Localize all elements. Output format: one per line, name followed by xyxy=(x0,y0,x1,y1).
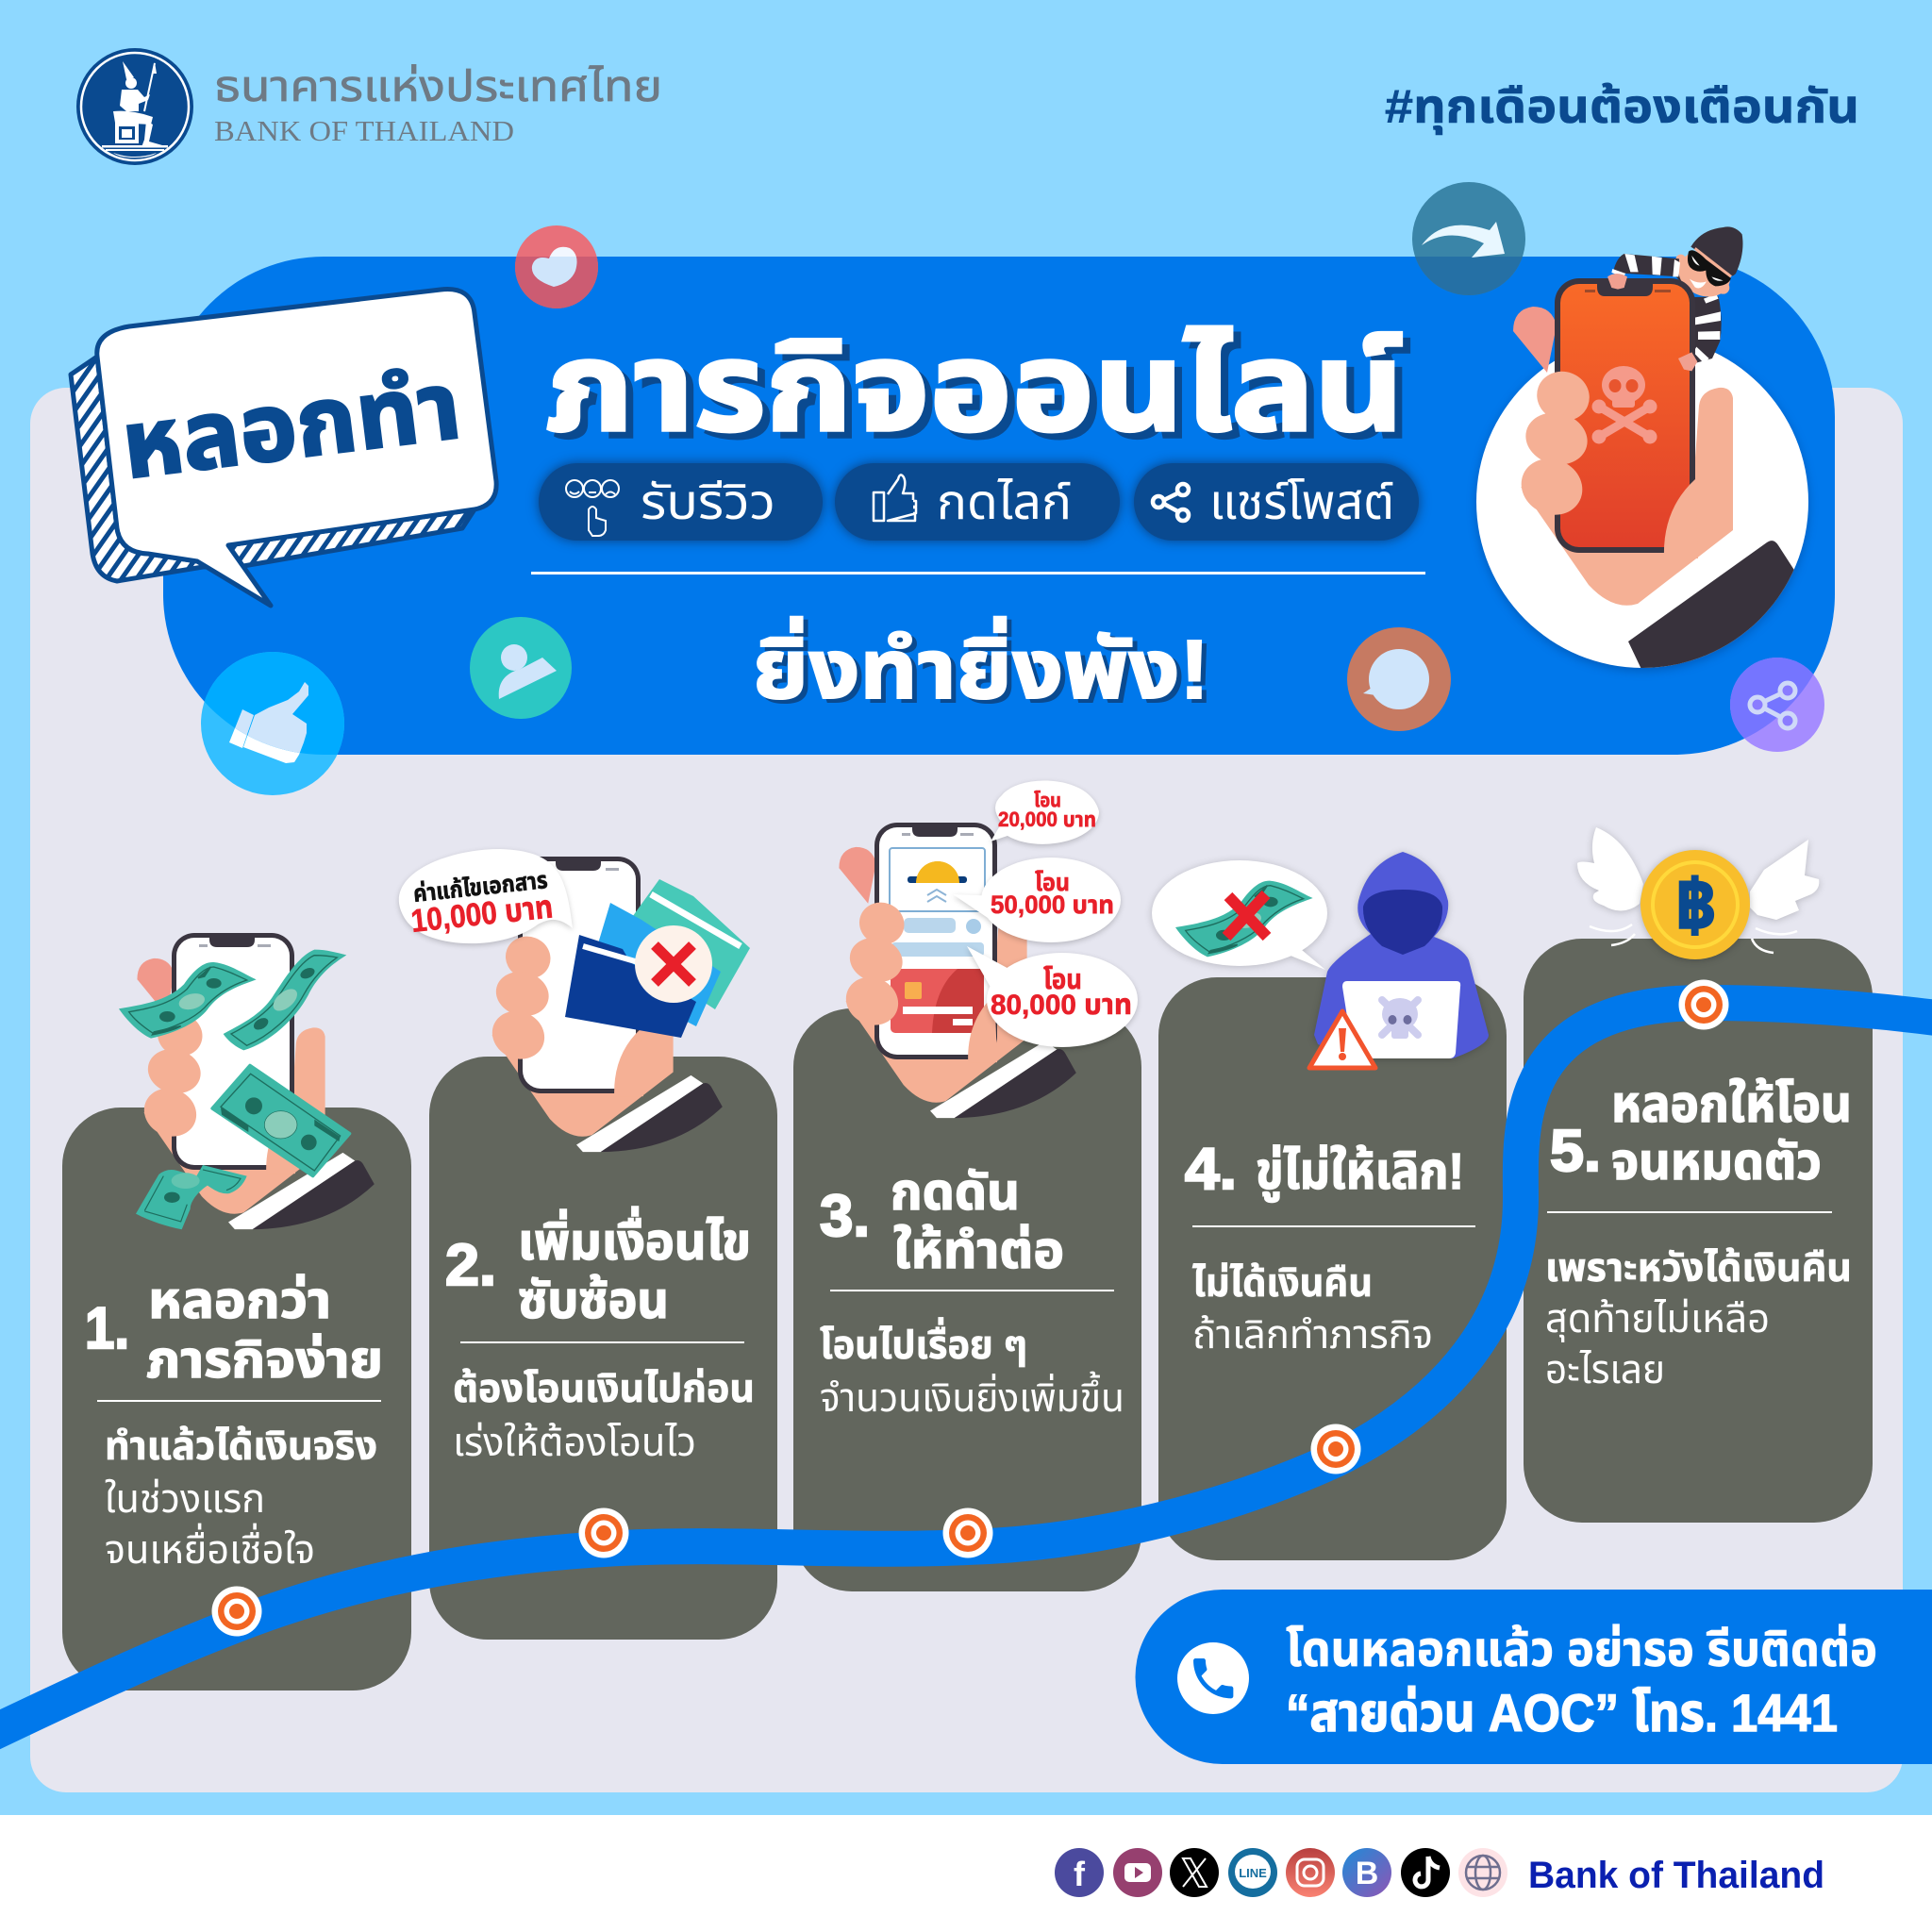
heading 5 xyxy=(1611,1076,1852,1191)
card 4 xyxy=(1158,977,1507,1560)
speech bubble: หลอกทำ xyxy=(71,290,496,606)
logo wordmark Thai: ธนาคารแห่งประเทศไทย xyxy=(214,61,662,110)
icon: share bubble xyxy=(1730,658,1824,752)
card 2 xyxy=(429,1057,777,1640)
bubble: 80,000 baht xyxy=(967,946,1138,1047)
payment screen content xyxy=(890,848,985,1033)
card 1 text xyxy=(85,1273,383,1572)
body 5: สุดท้ายไม่เหลือ xyxy=(1545,1296,1770,1342)
body 1: ทำแล้วได้เงินจริง xyxy=(105,1424,377,1468)
illustration: thief arm over phone xyxy=(1607,254,1697,371)
card 4 text xyxy=(1185,1137,1475,1357)
heading 1: หลอกว่า xyxy=(148,1273,331,1329)
heading 4: ขู่ไม่ให้เลิก! xyxy=(1256,1143,1464,1202)
icon: thumbs up outline xyxy=(874,475,916,521)
card 2 text xyxy=(445,1207,755,1464)
heading 2: ซับซ้อน xyxy=(518,1273,669,1329)
number 2: 2. xyxy=(445,1233,496,1298)
body 4 xyxy=(1192,1260,1433,1357)
bubble: 80,000 baht: 80,000 บาท xyxy=(991,990,1132,1021)
icon: blockdit: B xyxy=(1356,1856,1378,1891)
card 2 illustration: hand, phone, folders xyxy=(399,849,750,1152)
footer band xyxy=(0,1815,1932,1932)
speech bubble: no money xyxy=(1152,860,1327,970)
body 1: จนเหยื่อเชื่อใจ xyxy=(105,1523,315,1572)
pill: รับรีวิว xyxy=(539,463,823,541)
speech bubble: document fee: ค่าแก้ไขเอกสาร xyxy=(412,867,549,908)
icon: youtube xyxy=(1113,1848,1162,1897)
number 3: 3. xyxy=(820,1184,870,1249)
money bill centre xyxy=(212,1065,350,1176)
icon: review faces xyxy=(566,480,619,536)
body 1: ในช่วงแรก xyxy=(105,1476,265,1521)
logo: Bank of Thailand seal xyxy=(76,48,193,165)
speech bubble: document fee: 10,000 บาท xyxy=(409,889,555,940)
hotline callout: โดนหลอกแล้ว อย่ารอ รีบติดต่อ xyxy=(1286,1623,1877,1677)
bubble: 50,000 baht: 50,000 บาท xyxy=(991,891,1114,919)
speech bubble: document fee xyxy=(399,849,573,943)
bubble: 20,000 baht: 20,000 บาท xyxy=(998,808,1096,831)
icon: line xyxy=(1228,1848,1277,1897)
body 2: ต้องโอนเงินไปก่อน xyxy=(453,1366,755,1410)
body 2: เร่งให้ต้องโอนไว xyxy=(453,1420,696,1464)
heading 3: ให้ทำต่อ xyxy=(893,1223,1064,1279)
logo wordmark English: BANK OF THAILAND xyxy=(214,114,514,147)
icon: X xyxy=(1170,1848,1219,1897)
money bill top right xyxy=(224,950,346,1050)
illustration: hand holding phone with thief xyxy=(1476,226,1816,679)
body 4: ไม่ได้เงินคืน xyxy=(1192,1260,1373,1305)
icon: heart bubble xyxy=(515,225,598,308)
number 1: 1. xyxy=(85,1296,129,1361)
heading 3: กดดัน xyxy=(891,1164,1020,1221)
icon: facebook xyxy=(1055,1848,1104,1897)
pin 5 xyxy=(1679,979,1728,1030)
phone with skull xyxy=(1555,278,1695,553)
illustration: thief body and head xyxy=(1671,226,1742,363)
grey content panel xyxy=(30,388,1903,1792)
heading 5: หลอกให้โอน xyxy=(1611,1076,1852,1133)
icon: person bubble xyxy=(470,617,572,719)
body 5: อะไรเลย xyxy=(1545,1347,1665,1391)
icon: share arrow bubble xyxy=(1412,182,1525,295)
pin 3 xyxy=(943,1507,992,1558)
body 1 xyxy=(105,1424,377,1572)
icon: line: LINE xyxy=(1239,1866,1267,1880)
hotline callout: “สายด่วน AOC” โทร. 1441 xyxy=(1286,1683,1838,1742)
money bill top left xyxy=(119,962,257,1039)
card 3 illustration: hand, phone, payment screen xyxy=(838,780,1138,1118)
icon: facebook: f xyxy=(1074,1855,1086,1893)
progress curve xyxy=(0,1003,1932,1734)
banner xyxy=(163,257,1835,755)
icon: share outline xyxy=(1153,484,1189,521)
icon: website xyxy=(1458,1848,1507,1897)
card 5 text xyxy=(1545,1076,1852,1391)
pill: แชร์โพสต์: แชร์โพสต์ xyxy=(1209,475,1394,530)
pin 1 xyxy=(211,1587,262,1636)
icon: blockdit xyxy=(1342,1848,1391,1897)
card 5 illustration: flying baht coin xyxy=(1577,827,1819,959)
pin 2 xyxy=(579,1507,628,1558)
warning triangle xyxy=(1309,1011,1375,1068)
hooded figure xyxy=(1314,852,1489,1058)
heading 3 xyxy=(891,1164,1064,1279)
card 4 illustration: hacker with laptop xyxy=(1152,852,1489,1068)
heading 5: จนหมดตัว xyxy=(1611,1134,1822,1191)
body 3: จำนวนเงินยิ่งเพิ่มขึ้น xyxy=(820,1371,1124,1420)
title: ภารกิจออนไลน์: ภารกิจออนไลน์ xyxy=(545,318,1404,457)
pill: กดไลก์: กดไลก์ xyxy=(937,475,1072,530)
bubble: 80,000 baht: โอน xyxy=(1043,965,1082,995)
body 3: โอนไปเรื่อย ๆ xyxy=(820,1317,1027,1367)
bubble: 20,000 baht xyxy=(991,780,1099,844)
heading 1: ภารกิจง่าย xyxy=(146,1332,383,1389)
pill: แชร์โพสต์ xyxy=(1134,463,1419,541)
bubble: 50,000 baht xyxy=(953,858,1121,942)
card 5 illustration: flying baht coin: ฿ xyxy=(1675,866,1717,946)
body 5: เพราะหวังได้เงินคืน xyxy=(1545,1245,1852,1290)
coin wings xyxy=(1577,827,1819,920)
card 3 xyxy=(793,1008,1141,1591)
pill: รับรีวิว: รับรีวิว xyxy=(641,475,775,530)
speech bubble: หลอกทำ: หลอกทำ xyxy=(116,353,466,499)
folders xyxy=(565,879,750,1038)
heading 2: เพิ่มเงื่อนไข xyxy=(518,1207,751,1271)
subtitle: ยิ่งทำยิ่งพัง: ยิ่งทำยิ่งพัง! xyxy=(753,616,1209,716)
hashtag: #ทุกเดือนต้องเตือนกัน xyxy=(1385,80,1859,135)
card 3 text xyxy=(820,1164,1124,1420)
heading 2 xyxy=(518,1207,751,1329)
pin 4 xyxy=(1311,1424,1360,1474)
card 5 xyxy=(1524,939,1873,1523)
icon: comment bubble xyxy=(1347,627,1451,731)
bubble: 50,000 baht: โอน xyxy=(1035,868,1070,896)
card 1 illustration: hand, phone and money xyxy=(119,933,375,1229)
footer brand name: Bank of Thailand xyxy=(1528,1855,1824,1896)
icon: instagram xyxy=(1286,1848,1335,1897)
hotline callout xyxy=(1136,1590,1932,1764)
red cross badge xyxy=(635,925,712,1003)
icon: phone xyxy=(1177,1642,1249,1714)
skull icon xyxy=(1382,998,1418,1039)
icon: thumbs-up bubble xyxy=(201,652,344,795)
body 3 xyxy=(820,1317,1124,1420)
number 4: 4. xyxy=(1185,1137,1237,1202)
money bill bottom xyxy=(136,1165,247,1229)
card 1 xyxy=(62,1108,411,1690)
bubble: 20,000 baht: โอน xyxy=(1034,791,1061,811)
body 5 xyxy=(1545,1245,1852,1391)
pill: กดไลก์ xyxy=(835,463,1120,541)
body 2 xyxy=(453,1366,755,1464)
social icons xyxy=(1055,1848,1507,1897)
icon: tiktok xyxy=(1401,1848,1450,1897)
body 4: ถ้าเลิกทำภารกิจ xyxy=(1192,1312,1433,1357)
number 5: 5. xyxy=(1550,1119,1601,1184)
heading 1 xyxy=(146,1273,383,1389)
